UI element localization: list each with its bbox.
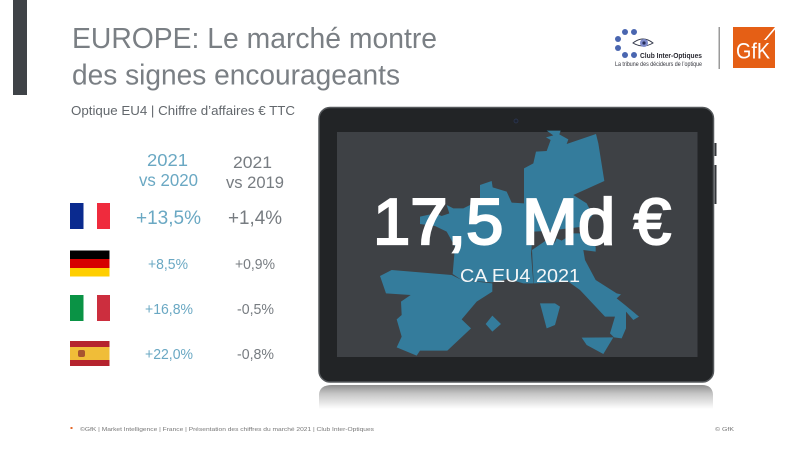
map: Spain (380, 270, 492, 356)
row: Germany: +8,5% (148, 257, 188, 273)
column header: 2021 vs 2019: 2021 (233, 153, 272, 172)
flag: Italy (70, 295, 110, 321)
row: Germany: +0,9% (235, 257, 275, 273)
flag: France (70, 203, 110, 229)
tablet (319, 108, 714, 382)
row: Italy (70, 295, 274, 321)
column header: 2021 vs 2019: vs 2019 (226, 173, 284, 192)
headline figure: 17,5 Md € (373, 185, 671, 258)
footer source: ©GfK | Market Intelligence | France | Présentation des chiffres du marché 2021 | Club Inter-Optiques (80, 426, 374, 433)
map: Italy (532, 233, 639, 338)
row: Italy: -0,5% (237, 302, 274, 318)
row: Germany (70, 250, 275, 276)
row: France (70, 203, 282, 229)
logo: GfK (733, 27, 775, 68)
tablet side buttons (714, 143, 716, 204)
tablet screen (337, 132, 698, 357)
accent bar (13, 0, 27, 95)
row: Italy: +16,8% (145, 302, 193, 318)
row: France: +1,4% (228, 208, 282, 229)
title (72, 23, 437, 92)
title: EUROPE: Le marché montre (72, 23, 437, 55)
logo: Club Inter-Optiques (615, 29, 703, 68)
logo: GfK: GfK (736, 38, 770, 64)
logo: Club Inter-Optiques: Club Inter-Optiques (640, 53, 702, 60)
map: Sicily (582, 337, 613, 354)
map of Europe (380, 131, 639, 356)
headline caption: CA EU4 2021 (460, 266, 580, 286)
column header: 2021 vs 2020: vs 2020 (139, 170, 198, 190)
row: France: +13,5% (136, 208, 201, 229)
logo: Club Inter-Optiques: La tribune des décideurs de l’optique (615, 62, 703, 68)
footer bullet (70, 427, 72, 429)
map: France and Germany (420, 131, 604, 283)
flag: Germany (70, 250, 110, 276)
column header: 2021 vs 2019 (226, 153, 284, 192)
title: des signes encourageants (72, 60, 400, 92)
tablet reflection (319, 385, 713, 409)
logo divider (718, 27, 720, 69)
row: Spain: +22,0% (145, 347, 193, 363)
column header: 2021 vs 2020 (139, 150, 198, 190)
flag: Spain (70, 341, 110, 366)
column header: 2021 vs 2020: 2021 (147, 150, 188, 170)
subtitle: Optique EU4 | Chiffre d’affaires € TTC (71, 103, 295, 118)
row: Spain (70, 341, 274, 366)
row: Spain: -0,8% (237, 347, 274, 363)
tablet camera (514, 119, 518, 123)
footer copyright: © GfK (715, 426, 734, 433)
map: Sardinia (540, 303, 560, 328)
map: Balearic island (486, 316, 501, 332)
